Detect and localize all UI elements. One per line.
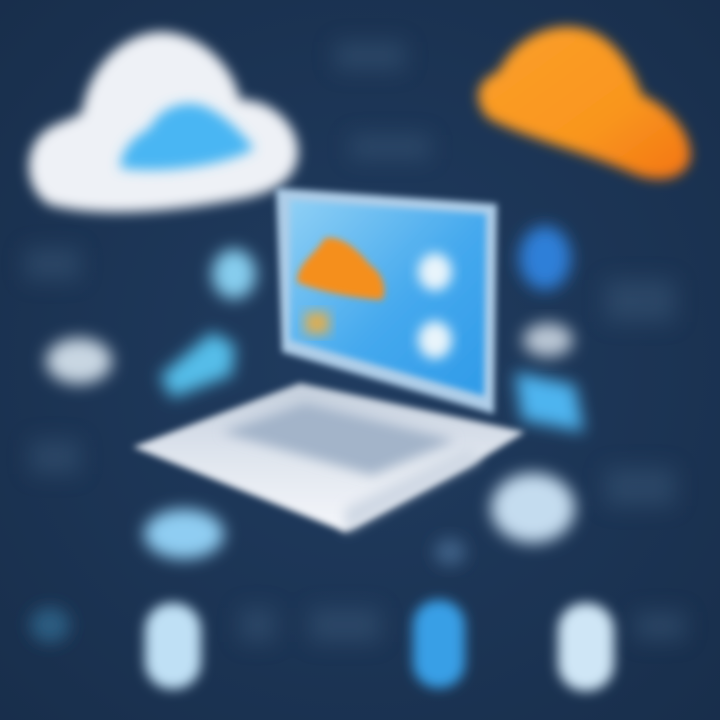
cloud: orange: [478, 27, 690, 179]
icon: grey oval node: [46, 338, 112, 384]
capsule: blue middle: [413, 600, 465, 688]
laptop screen frame: [276, 188, 497, 414]
connector icons: right column: [491, 226, 584, 543]
icon: grey device: [523, 323, 573, 357]
small faint node: [434, 538, 466, 566]
icon: light blue node: [212, 249, 256, 299]
capsule: pale right: [558, 603, 614, 691]
capsule: pale left: [145, 603, 201, 689]
faint left node: [30, 607, 70, 643]
screen orange cloud: [297, 238, 384, 300]
cloud inner: blue: [120, 104, 254, 170]
base shadow edge: [345, 448, 480, 532]
screen white icon bottom: [418, 321, 452, 359]
screen small orange tile: [305, 312, 329, 334]
icon: blue device: [519, 226, 571, 290]
icon: pale globe: [491, 473, 575, 543]
laptop: [133, 188, 525, 532]
laptop base: [133, 383, 525, 532]
bottom capsule icons: [30, 538, 614, 691]
icon: blue small cloud: [160, 332, 235, 398]
icon: lower left cloud: [144, 509, 224, 559]
icon: light blue folder: [515, 372, 584, 432]
cloud: white: [29, 32, 298, 212]
laptop screen: [290, 200, 486, 396]
keyboard: [222, 403, 455, 475]
screen white icon top: [418, 253, 452, 291]
connector icons: left column: [46, 249, 256, 559]
faint background labels: [25, 42, 685, 642]
